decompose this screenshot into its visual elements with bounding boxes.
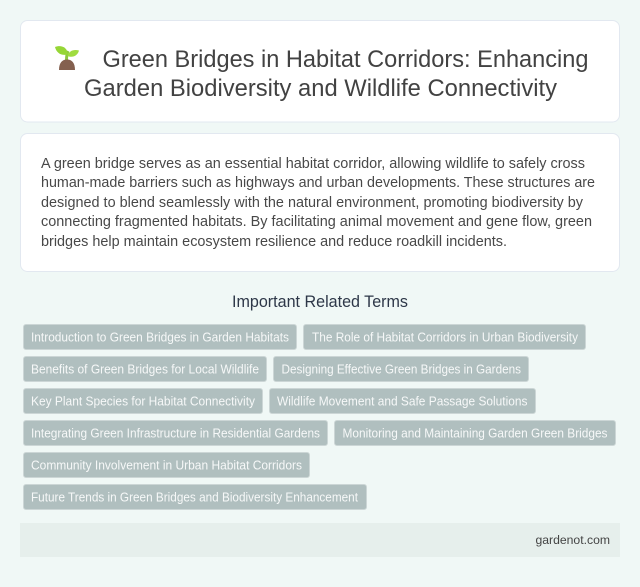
icon: seedling — [55, 46, 79, 70]
tag 2 — [304, 324, 586, 350]
description paragraph: connecting fragmented habitats. By facilitating animal movement and gene flow, green — [41, 214, 592, 230]
description paragraph: human-made barriers such as highways and urban developments. These structures are — [41, 175, 595, 191]
tag 8: Monitoring and Maintaining Garden Green Bridges — [342, 426, 608, 440]
footer source text: gardenot.com — [536, 533, 610, 547]
description paragraph: designed to blend seamlessly with the natural environment, promoting biodiversity by — [41, 195, 584, 211]
panel: description card — [20, 134, 620, 272]
tag 4: Designing Effective Green Bridges in Gardens — [282, 362, 521, 376]
heading: related terms: Important Related Terms — [232, 293, 408, 311]
tag 3: Benefits of Green Bridges for Local Wildlife — [31, 362, 259, 376]
title text: Green Bridges in Habitat Corridors: Enhancing — [102, 46, 588, 73]
description paragraph — [41, 156, 595, 250]
tag 4 — [274, 356, 528, 382]
tag 9 — [24, 452, 310, 478]
tag 7: Integrating Green Infrastructure in Residential Gardens — [31, 426, 320, 440]
tag 5: Key Plant Species for Habitat Connectivity — [31, 394, 256, 408]
tag 10: Future Trends in Green Bridges and Biodiversity Enhancement — [31, 490, 358, 504]
description paragraph: bridges help maintain ecosystem resilience and reduce roadkill incidents. — [41, 234, 507, 250]
tag 5 — [24, 388, 262, 414]
title text — [84, 46, 588, 102]
panel: title card — [20, 20, 620, 122]
title text: Garden Biodiversity and Wildlife Connectivity — [84, 75, 558, 102]
tag 10 — [24, 484, 366, 510]
tag list — [24, 324, 616, 510]
description paragraph: A green bridge serves as an essential habitat corridor, allowing wildlife to safely cross — [41, 156, 585, 172]
tag 3 — [24, 356, 266, 382]
tag 6 — [270, 388, 536, 414]
tag 8 — [334, 420, 616, 446]
tag 1: Introduction to Green Bridges in Garden Habitats — [31, 330, 289, 344]
tag 2: The Role of Habitat Corridors in Urban Biodiversity — [312, 330, 579, 344]
tag 6: Wildlife Movement and Safe Passage Solutions — [277, 394, 528, 408]
tag 9: Community Involvement in Urban Habitat Corridors — [31, 458, 302, 472]
tag 7 — [24, 420, 328, 446]
footer — [20, 523, 620, 557]
tag 1 — [24, 324, 296, 350]
